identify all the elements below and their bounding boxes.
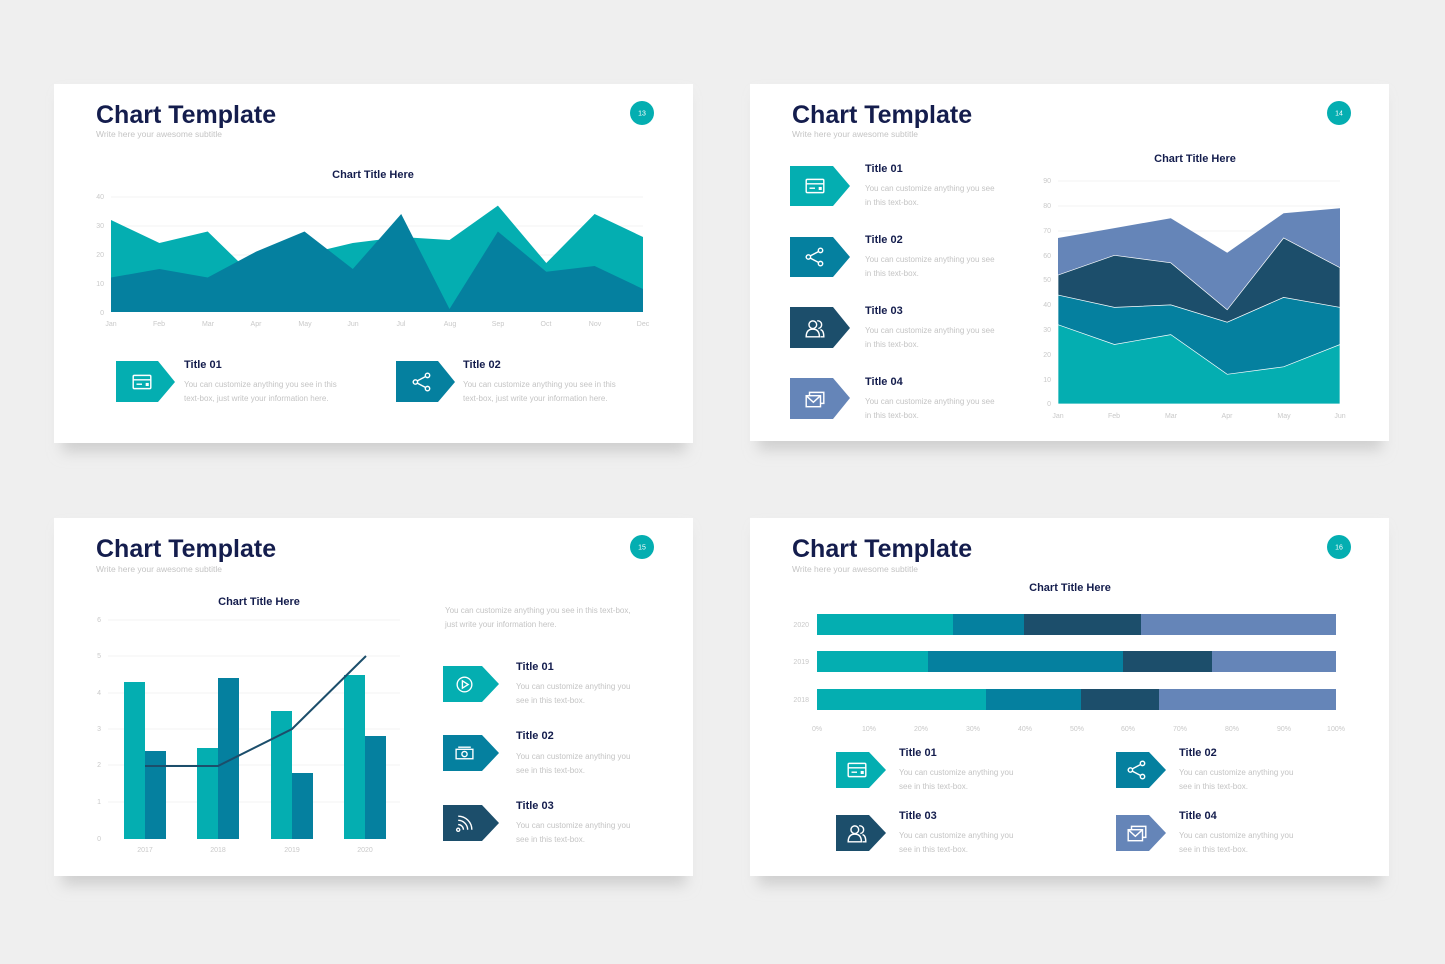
bar chart	[97, 617, 400, 854]
area chart: 0	[100, 310, 104, 317]
stacked area chart: 0	[1047, 401, 1051, 408]
subtitle: Write here your awesome subtitle	[792, 129, 918, 139]
stacked bar chart: 90%	[1277, 726, 1291, 733]
item: Title 03	[836, 810, 1013, 854]
stacked bar chart: 60%	[1121, 726, 1135, 733]
item: Title 02	[1116, 747, 1293, 791]
item: Title 04: see in this text-box.	[1179, 845, 1248, 854]
item: Title 01: text-box, just write your information here.	[184, 394, 329, 403]
item: Title 01	[836, 747, 1013, 791]
item: Title 02: Title 02	[1179, 747, 1217, 759]
area chart: 10	[96, 281, 104, 288]
page badge	[1327, 101, 1351, 125]
stacked area chart: May	[1277, 413, 1291, 420]
area chart: 30	[96, 223, 104, 230]
stacked area chart: 40	[1043, 302, 1051, 309]
bar chart: 2017	[137, 847, 153, 854]
area chart: Oct	[541, 321, 551, 328]
item: Title 04: You can customize anything you see	[865, 397, 995, 406]
item: Title 04: in this text-box.	[865, 411, 919, 420]
subtitle: Write here your awesome subtitle	[792, 564, 918, 574]
bar chart: 5	[97, 653, 101, 660]
area chart: Jul	[397, 321, 406, 328]
stacked area chart: Jun	[1334, 413, 1346, 420]
area chart: Nov	[589, 321, 602, 328]
bar chart: 4	[97, 690, 101, 697]
area chart: 20	[96, 252, 104, 259]
area chart: Jan	[105, 321, 117, 328]
stacked bar chart: 0%	[812, 726, 822, 733]
stacked area chart	[1043, 178, 1346, 420]
item: Title 04: Title 04	[865, 376, 904, 388]
title: Chart Template	[792, 101, 972, 129]
stacked area chart: 80	[1043, 203, 1051, 210]
item: Title 02	[443, 730, 630, 775]
item: Title 03: Title 03	[899, 810, 937, 822]
item: Title 01: Title 01	[516, 661, 554, 673]
stacked bar chart: 2019	[793, 659, 809, 666]
stacked bar chart: 20%	[914, 726, 928, 733]
item: Title 02: see in this text-box.	[516, 766, 585, 775]
bar chart: 2019	[284, 847, 300, 854]
bar chart: 2020	[357, 847, 373, 854]
item: Title 01: You can customize anything you see	[865, 184, 995, 193]
item: Title 01: in this text-box.	[865, 198, 919, 207]
item: Title 01	[443, 661, 630, 705]
item: Title 01: You can customize anything you	[516, 682, 630, 691]
item: Title 01: You can customize anything you	[899, 768, 1013, 777]
stacked bar chart	[793, 614, 1345, 733]
item: Title 02: You can customize anything you see	[865, 255, 995, 264]
item: Title 03	[443, 800, 630, 844]
page badge	[1327, 535, 1351, 559]
area chart: Dec	[637, 321, 650, 328]
area chart: Sep	[492, 321, 504, 328]
item: Title 01: Title 01	[899, 747, 937, 759]
page badge: 15	[638, 544, 646, 552]
page badge: 14	[1335, 110, 1343, 118]
subtitle: Write here your awesome subtitle	[96, 564, 222, 574]
item: Title 03: You can customize anything you see	[865, 326, 995, 335]
stacked bar chart: 2018	[793, 697, 809, 704]
item: Title 03: Title 03	[516, 800, 554, 812]
item: Title 02: see in this text-box.	[1179, 782, 1248, 791]
stacked area chart: Feb	[1108, 413, 1120, 420]
intro text	[444, 606, 631, 629]
intro text: just write your information here.	[444, 620, 557, 629]
page badge: 13	[638, 110, 646, 118]
item: Title 01: Title 01	[184, 359, 222, 371]
chart title: Chart Title Here	[218, 596, 300, 608]
stacked area chart: 20	[1043, 352, 1051, 359]
stacked area chart: 10	[1043, 377, 1051, 384]
item: Title 02: Title 02	[463, 359, 501, 371]
title: Chart Template	[96, 535, 276, 563]
panel: slide 15 bar and line chart	[54, 518, 693, 885]
area chart: Jun	[347, 321, 359, 328]
item: Title 01: Title 01	[865, 163, 903, 175]
stacked area chart: Apr	[1222, 413, 1233, 420]
area chart: Mar	[202, 321, 215, 328]
item: Title 01	[116, 359, 337, 403]
item: Title 01: You can customize anything you see in this	[184, 380, 337, 389]
intro text: You can customize anything you see in this text-box,	[445, 606, 631, 615]
item: Title 02: Title 02	[516, 730, 554, 742]
panel: slide 14 stacked area chart	[750, 84, 1389, 450]
item: Title 02: Title 02	[865, 234, 903, 246]
chart title: Chart Title Here	[332, 169, 414, 181]
stacked bar chart: 30%	[966, 726, 980, 733]
stacked area chart: 30	[1043, 327, 1051, 334]
area chart	[96, 194, 650, 328]
item: Title 01	[790, 163, 995, 207]
stacked bar chart: 100%	[1327, 726, 1345, 733]
stacked area chart: 60	[1043, 253, 1051, 260]
stacked bar chart: 50%	[1070, 726, 1084, 733]
item: Title 02: You can customize anything you	[516, 752, 630, 761]
bar chart: 6	[97, 617, 101, 624]
item: Title 02: You can customize anything you see in this	[463, 380, 616, 389]
item: Title 02: text-box, just write your information here.	[463, 394, 608, 403]
stacked bar chart: 10%	[862, 726, 876, 733]
stacked area chart: Jan	[1052, 413, 1064, 420]
subtitle: Write here your awesome subtitle	[96, 129, 222, 139]
bar chart: 1	[97, 799, 101, 806]
stacked bar chart: 40%	[1018, 726, 1032, 733]
bar chart: 0	[97, 836, 101, 843]
area chart: 40	[96, 194, 104, 201]
chart title: Chart Title Here	[1154, 153, 1236, 165]
stacked area chart: Mar	[1165, 413, 1178, 420]
title: Chart Template	[96, 101, 276, 129]
bar chart: 2	[97, 762, 101, 769]
stacked bar chart: 70%	[1173, 726, 1187, 733]
bar chart: 3	[97, 726, 101, 733]
item: Title 02: in this text-box.	[865, 269, 919, 278]
item: Title 01: see in this text-box.	[899, 782, 968, 791]
item: Title 04	[790, 376, 995, 420]
item: Title 03: Title 03	[865, 305, 903, 317]
stacked bar chart: 2020	[793, 622, 809, 629]
area chart: Feb	[153, 321, 165, 328]
chart title: Chart Title Here	[1029, 582, 1111, 594]
area chart: Apr	[251, 321, 262, 328]
item: Title 02	[396, 359, 616, 403]
item: Title 04: Title 04	[1179, 810, 1218, 822]
bar chart: 2018	[210, 847, 226, 854]
item: Title 03	[790, 305, 995, 349]
page badge: 16	[1335, 544, 1343, 552]
area chart: May	[298, 321, 312, 328]
area chart: Aug	[444, 321, 456, 328]
panel: slide 13 area chart	[54, 84, 693, 452]
item: Title 03: You can customize anything you	[899, 831, 1013, 840]
item: Title 03: see in this text-box.	[516, 835, 585, 844]
item: Title 03: in this text-box.	[865, 340, 919, 349]
stacked area chart: 90	[1043, 178, 1051, 185]
item: Title 03: You can customize anything you	[516, 821, 630, 830]
stacked area chart: 70	[1043, 228, 1051, 235]
title: Chart Template	[792, 535, 972, 563]
page badge	[630, 535, 654, 559]
item: Title 03: see in this text-box.	[899, 845, 968, 854]
item: Title 02: You can customize anything you	[1179, 768, 1293, 777]
stacked bar chart: 80%	[1225, 726, 1239, 733]
item: Title 01: see in this text-box.	[516, 696, 585, 705]
panel: slide 16 stacked bar chart	[750, 518, 1389, 885]
page badge	[630, 101, 654, 125]
stacked area chart: 50	[1043, 277, 1051, 284]
item: Title 04	[1116, 810, 1293, 854]
item: Title 04: You can customize anything you	[1179, 831, 1293, 840]
item: Title 02	[790, 234, 995, 278]
